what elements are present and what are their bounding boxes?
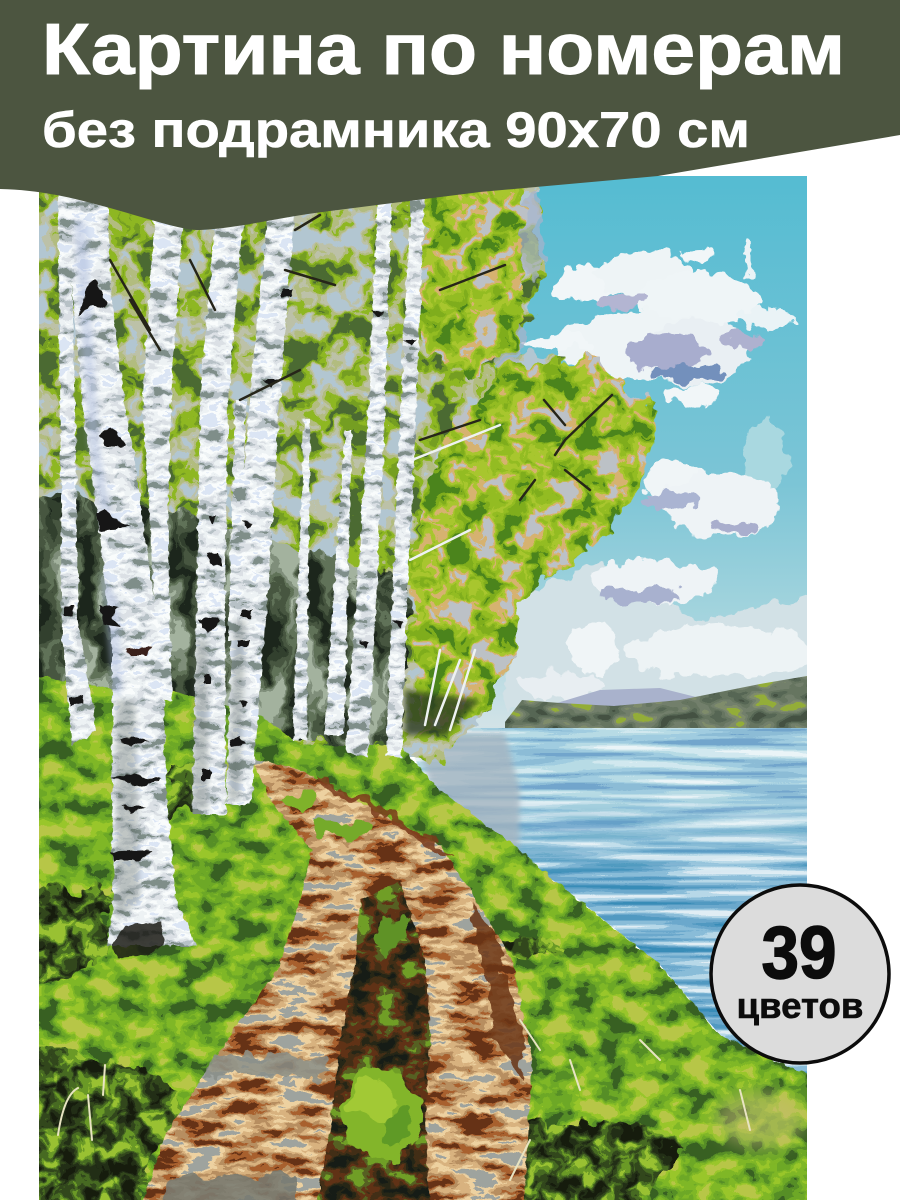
birch trunks	[50, 180, 440, 960]
deep water	[489, 798, 807, 1074]
olive patch at right	[715, 1092, 805, 1148]
small wisp	[744, 240, 752, 276]
green plant on the path	[342, 917, 422, 1161]
dark grass	[39, 762, 684, 1200]
header banner	[0, 0, 900, 230]
bright tree crown on the right	[406, 188, 658, 736]
middle cloud	[641, 462, 780, 537]
far mountain	[558, 688, 696, 706]
dirt path	[120, 750, 540, 1200]
trunk grey shading	[116, 620, 246, 920]
forest foliage	[0, 170, 570, 770]
badge: 39 colours	[711, 885, 889, 1063]
path shadows	[160, 770, 525, 1200]
white twigs	[410, 425, 500, 730]
lower haze	[505, 562, 830, 710]
dark forest depth	[39, 490, 414, 746]
main trunk base	[112, 922, 165, 958]
low forest darkness near shore	[405, 690, 480, 735]
title: Картина по номерам	[42, 10, 845, 90]
ground grass	[39, 676, 807, 1200]
tree branches	[110, 215, 612, 500]
lavender leaf fringe	[496, 193, 544, 373]
blue trunk shading	[74, 220, 122, 700]
far hills	[505, 676, 807, 728]
badge label: цветов	[736, 985, 864, 1026]
sky	[472, 176, 807, 728]
grass inside path top	[280, 792, 377, 840]
upper cloud	[519, 248, 800, 404]
clouds	[505, 240, 830, 710]
badge number: 39	[762, 911, 836, 994]
bark marks	[64, 280, 416, 860]
subtitle: без подрамника 90х70 см	[42, 102, 750, 158]
shore reflection	[415, 733, 520, 850]
lower clouds	[516, 560, 815, 697]
central dark strip	[317, 881, 432, 1200]
pale sky wisp	[743, 419, 787, 491]
grass blades	[58, 1020, 750, 1180]
lake	[414, 728, 807, 1074]
